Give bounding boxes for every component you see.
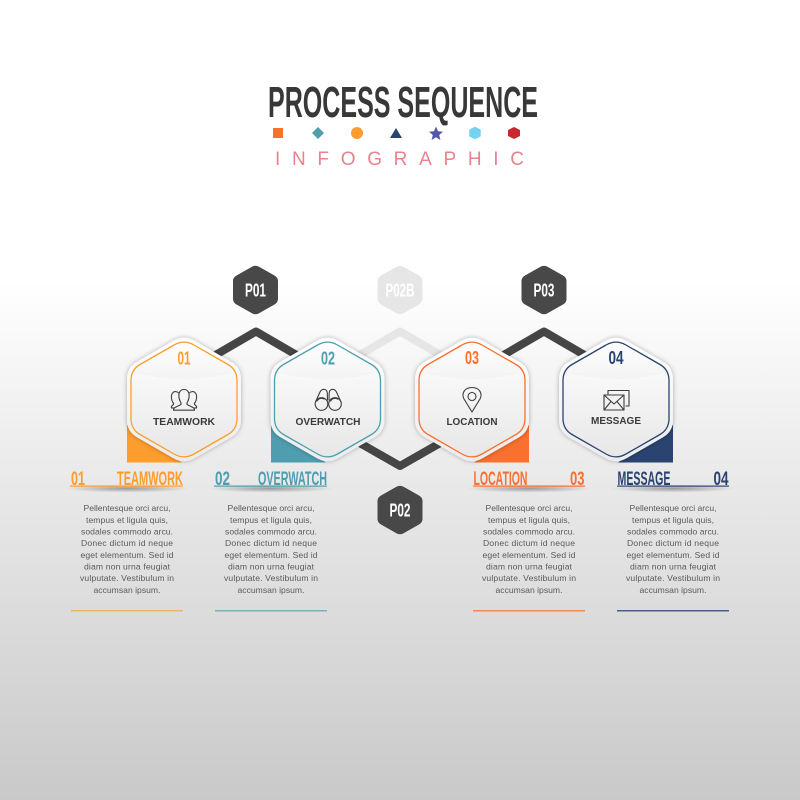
body text: Pellentesque orci arcu, bbox=[228, 503, 314, 513]
icon: teal diamond bbox=[312, 127, 324, 139]
body text: tempus et ligula quis, bbox=[230, 515, 312, 525]
number: 04 bbox=[608, 348, 624, 368]
subtitle: INFOGRAPHIC bbox=[275, 149, 524, 170]
badge: P03: P03 bbox=[534, 280, 554, 300]
body text: vulputate. Vestibulum in bbox=[482, 573, 576, 583]
header title: OVERWATCH bbox=[258, 469, 327, 490]
column: message text bbox=[611, 469, 735, 612]
body text bbox=[482, 503, 576, 595]
body text: sodales commodo arcu. bbox=[225, 526, 317, 536]
panel: hexagon 01 teamwork bbox=[127, 338, 241, 462]
label: TEAMWORK bbox=[153, 417, 216, 428]
body text: accumsan ipsum. bbox=[94, 585, 160, 595]
body text: Donec dictum id neque bbox=[483, 538, 575, 548]
icon: red hexagon bbox=[508, 127, 520, 139]
icon: purple star bbox=[429, 126, 443, 140]
body text: eget elementum. Sed id bbox=[80, 550, 174, 560]
corner accent bbox=[127, 425, 182, 462]
body text: Donec dictum id neque bbox=[225, 538, 317, 548]
body text: tempus et ligula quis, bbox=[632, 515, 714, 525]
icon: people bbox=[171, 390, 197, 410]
panel: hexagon 03 location bbox=[415, 338, 529, 462]
icon: light blue hexagon bbox=[470, 128, 480, 138]
badge: P02 bbox=[378, 486, 422, 534]
badge: P02: P02 bbox=[390, 500, 410, 520]
body text: eget elementum. Sed id bbox=[224, 550, 318, 560]
icon: navy triangle bbox=[390, 128, 402, 138]
label: OVERWATCH bbox=[296, 417, 360, 428]
footer rule bbox=[215, 610, 327, 612]
body text: diam non urna feugiat bbox=[84, 562, 171, 572]
corner accent bbox=[474, 425, 529, 462]
header underline bbox=[70, 486, 183, 487]
body text: diam non urna feugiat bbox=[486, 562, 573, 572]
body text: diam non urna feugiat bbox=[228, 562, 315, 572]
body text bbox=[224, 503, 318, 595]
body text: sodales commodo arcu. bbox=[81, 526, 173, 536]
number: 01 bbox=[178, 348, 190, 368]
body text: vulputate. Vestibulum in bbox=[626, 573, 720, 583]
header shadow bbox=[65, 484, 189, 492]
body text: eget elementum. Sed id bbox=[482, 550, 576, 560]
connector: P02 bbox=[344, 434, 456, 466]
footer rule bbox=[617, 610, 729, 612]
corner accent bbox=[271, 425, 326, 462]
header title: TEAMWORK bbox=[117, 469, 183, 490]
body text: accumsan ipsum. bbox=[238, 585, 304, 595]
badge: P01 bbox=[233, 266, 278, 314]
header underline bbox=[617, 486, 729, 487]
column: teamwork text bbox=[65, 469, 189, 612]
header title: LOCATION bbox=[474, 469, 528, 490]
header shadow bbox=[209, 484, 333, 492]
connector: P02B bbox=[344, 332, 456, 364]
panel: hexagon 04 message bbox=[559, 338, 673, 462]
body text: eget elementum. Sed id bbox=[626, 550, 720, 560]
number: 03 bbox=[465, 348, 479, 368]
body text: vulputate. Vestibulum in bbox=[80, 573, 174, 583]
label: MESSAGE bbox=[591, 416, 641, 427]
icon: binoculars bbox=[315, 389, 341, 410]
badge: P03 bbox=[522, 266, 566, 314]
body text: Donec dictum id neque bbox=[627, 538, 719, 548]
header underline bbox=[473, 486, 585, 487]
badge: P01: P01 bbox=[245, 280, 266, 300]
header shadow bbox=[611, 484, 735, 492]
title: PROCESS SEQUENCE bbox=[268, 78, 538, 127]
footer rule bbox=[473, 610, 585, 612]
body text: Pellentesque orci arcu, bbox=[84, 503, 170, 513]
column: location text bbox=[467, 469, 591, 612]
body text: vulputate. Vestibulum in bbox=[224, 573, 318, 583]
footer rule bbox=[71, 610, 183, 612]
body text bbox=[80, 503, 174, 595]
corner accent bbox=[618, 425, 673, 462]
header number: 04 bbox=[714, 469, 729, 490]
number: 02 bbox=[321, 348, 335, 368]
body text: diam non urna feugiat bbox=[630, 562, 717, 572]
icon: orange square bbox=[273, 128, 283, 138]
body text: accumsan ipsum. bbox=[496, 585, 562, 595]
body text: sodales commodo arcu. bbox=[483, 526, 575, 536]
body text: Pellentesque orci arcu, bbox=[486, 503, 572, 513]
connector: P01 bbox=[200, 332, 312, 364]
header title: MESSAGE bbox=[618, 469, 670, 490]
header underline bbox=[214, 486, 327, 487]
icon: orange circle bbox=[351, 127, 363, 139]
badge: P02B bbox=[378, 266, 422, 314]
badge: P02B: P02B bbox=[385, 280, 415, 300]
header number: 03 bbox=[570, 469, 584, 490]
label: LOCATION bbox=[446, 417, 498, 428]
icon: envelopes bbox=[604, 390, 629, 410]
header number: 01 bbox=[71, 469, 85, 490]
body text: tempus et ligula quis, bbox=[488, 515, 570, 525]
body text: tempus et ligula quis, bbox=[86, 515, 168, 525]
body text: accumsan ipsum. bbox=[640, 585, 706, 595]
panel: hexagon 02 overwatch bbox=[271, 338, 384, 462]
header number: 02 bbox=[215, 469, 230, 490]
body text: Donec dictum id neque bbox=[81, 538, 173, 548]
shape legend row bbox=[273, 126, 520, 140]
body text: sodales commodo arcu. bbox=[627, 526, 719, 536]
body text bbox=[626, 503, 720, 595]
header shadow bbox=[467, 484, 591, 492]
connector lines bbox=[200, 332, 600, 466]
icon: map pin bbox=[463, 388, 481, 412]
connector: P03 bbox=[488, 332, 600, 364]
column: overwatch text bbox=[209, 469, 333, 612]
body text: Pellentesque orci arcu, bbox=[630, 503, 716, 513]
